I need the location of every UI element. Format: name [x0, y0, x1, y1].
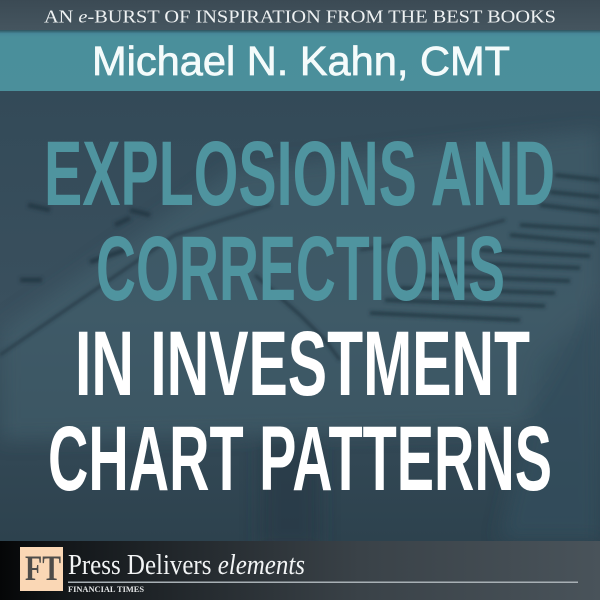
financial times label: FINANCIAL TIMES: [68, 585, 145, 594]
footer rule: [68, 582, 578, 583]
tagline: AN e-BURST OF INSPIRATION FROM THE BEST BOOKS: [44, 6, 556, 26]
top band: [0, 0, 600, 30]
title: [44, 123, 555, 510]
background: blurred chart photograph: [0, 91, 600, 550]
author name: Michael N. Kahn, CMT: [92, 38, 510, 84]
FT logo: [20, 547, 63, 591]
author band: [0, 30, 600, 91]
FT logo: FT: [25, 548, 61, 588]
footer band: [0, 541, 600, 600]
publisher name: Press Delivers elements: [68, 550, 305, 581]
